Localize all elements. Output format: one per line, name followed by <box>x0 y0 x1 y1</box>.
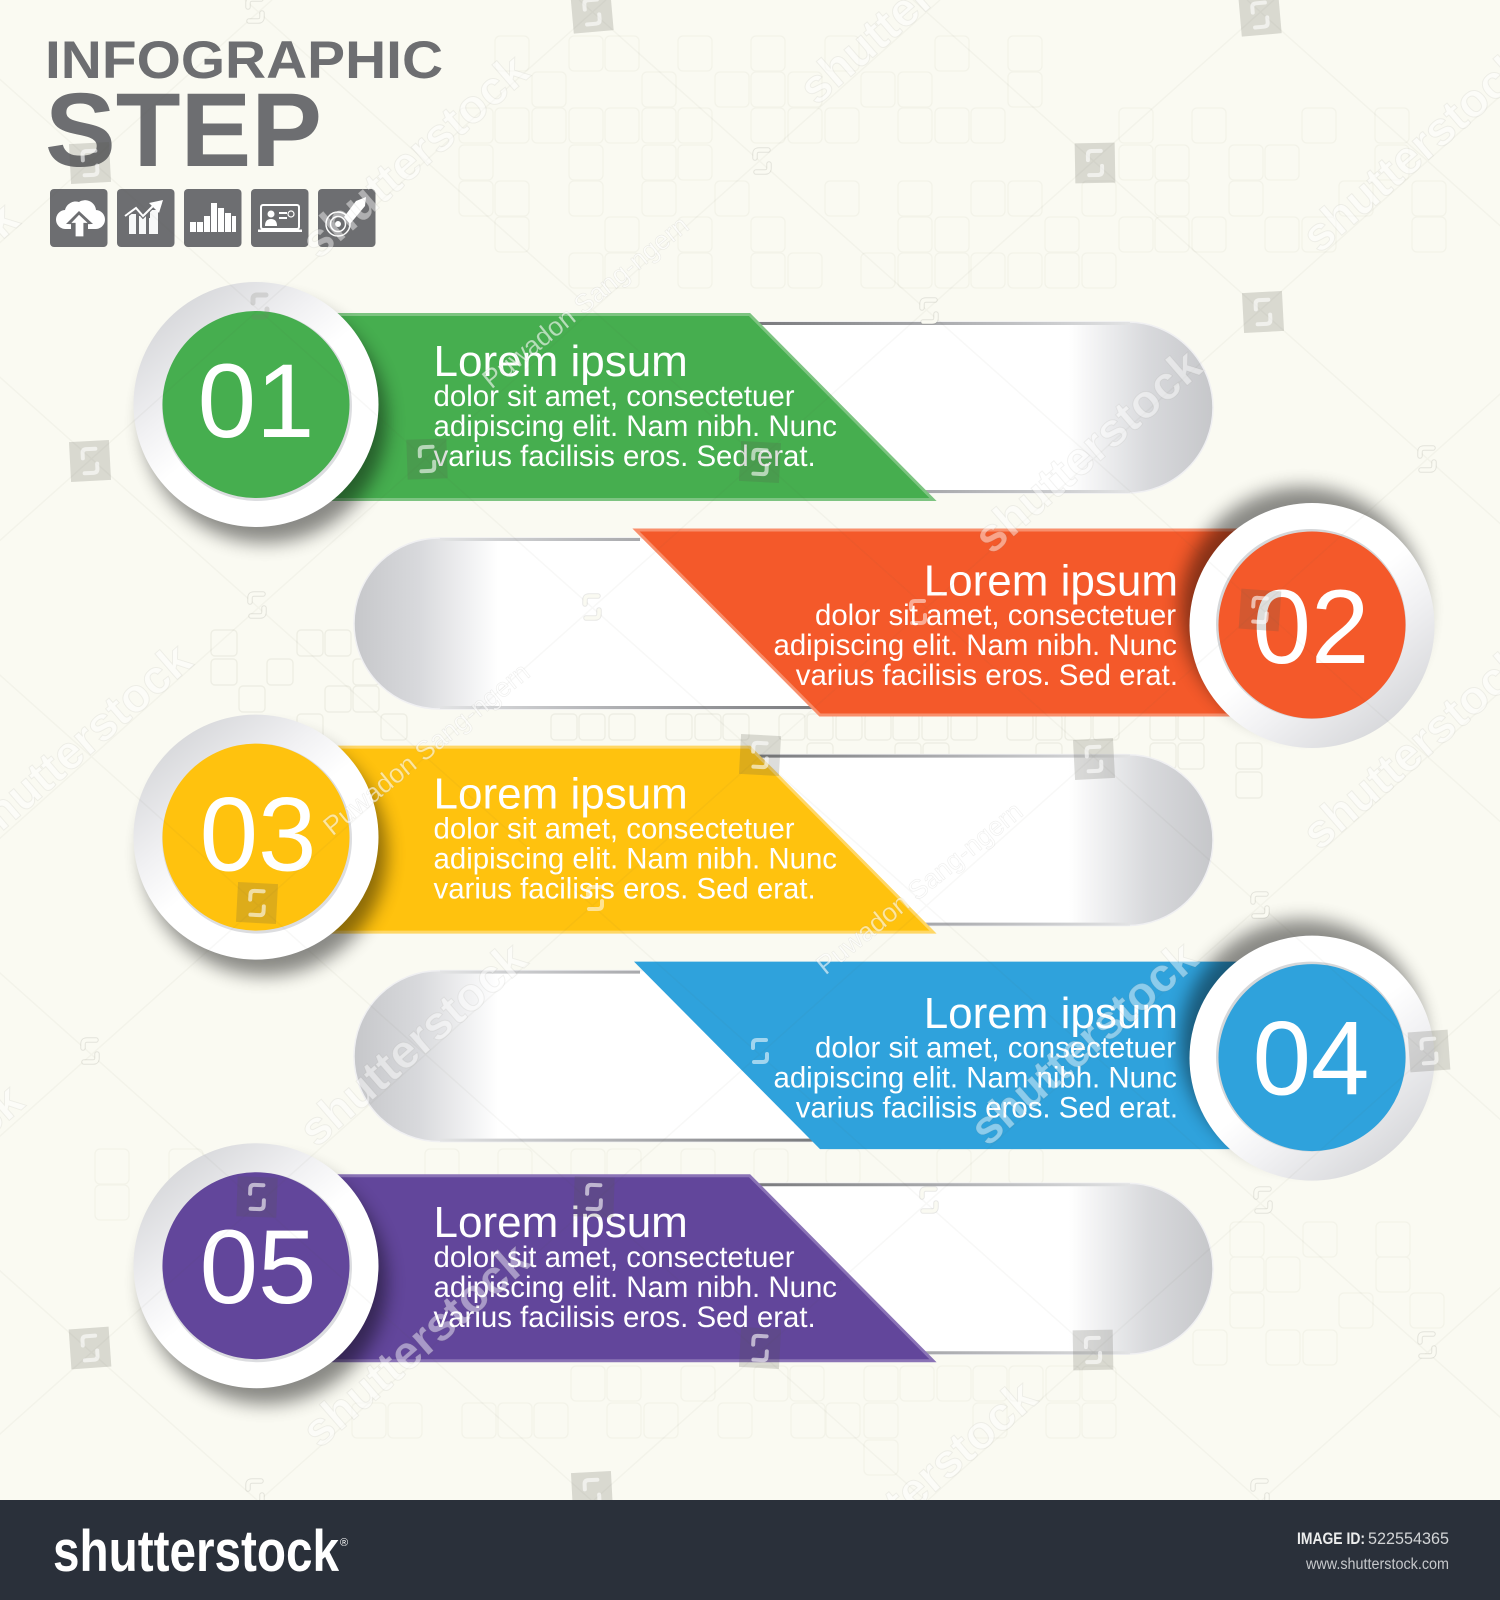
text block: varius facilisis eros. Sed erat. <box>796 659 1178 692</box>
band <box>330 747 933 932</box>
pill <box>740 322 1213 493</box>
step 04 <box>354 920 1434 1181</box>
text block: adipiscing elit. Nam nibh. Nunc <box>773 629 1177 662</box>
title <box>45 31 443 189</box>
circle shadow <box>143 299 387 543</box>
circle badge <box>162 744 352 934</box>
text block: dolor sit amet, consectetuer <box>815 1032 1176 1065</box>
circle badge: 04 <box>1253 1001 1369 1118</box>
text block: dolor sit amet, consectetuer <box>434 380 795 413</box>
pill <box>740 1183 1213 1354</box>
text block: adipiscing elit. Nam nibh. Nunc <box>434 410 837 443</box>
circle badge <box>1216 962 1406 1152</box>
text block: Lorem ipsum <box>924 989 1178 1038</box>
text block <box>773 556 1178 692</box>
step 01 <box>134 282 1213 543</box>
watermark text: shutterstock <box>288 930 537 1156</box>
icon: growth chart <box>117 189 174 247</box>
circle badge <box>1216 529 1406 719</box>
circle ring <box>134 282 378 527</box>
icon: target and rocket <box>318 189 376 247</box>
pill <box>354 538 830 709</box>
footer logo: ® <box>340 1537 348 1549</box>
watermark text: shutterstock <box>290 42 539 268</box>
step 05 <box>134 1143 1213 1404</box>
footer image id: 522554365 <box>1368 1530 1449 1548</box>
text block: Lorem ipsum <box>434 1198 688 1247</box>
text block: dolor sit amet, consectetuer <box>434 813 795 846</box>
circle shadow <box>1181 920 1425 1164</box>
icon: laptop video call <box>251 189 308 247</box>
text block: Lorem ipsum <box>434 770 688 819</box>
pill <box>740 755 1213 926</box>
watermark text: Puwadon Sang-ngern <box>810 796 1028 980</box>
text block <box>434 337 837 473</box>
text block: varius facilisis eros. Sed erat. <box>434 440 816 473</box>
circle badge <box>162 1172 352 1362</box>
circle badge <box>162 311 352 501</box>
circle badge: 05 <box>200 1209 316 1326</box>
text block <box>434 770 837 906</box>
watermark text: shutterstock <box>963 337 1212 563</box>
text block: Lorem ipsum <box>434 337 688 386</box>
circle shadow <box>1181 487 1425 731</box>
circle shadow <box>143 1160 387 1404</box>
circle badge: 03 <box>200 777 316 894</box>
text block: dolor sit amet, consectetuer <box>815 599 1176 632</box>
step 02 <box>354 487 1434 748</box>
watermark text: Puwadon Sang-ngern <box>476 210 694 394</box>
pill <box>354 971 830 1142</box>
circle badge: 02 <box>1253 569 1369 686</box>
circle badge: 01 <box>198 343 314 460</box>
text block: varius facilisis eros. Sed erat. <box>434 873 816 906</box>
text block: varius facilisis eros. Sed erat. <box>434 1301 816 1334</box>
footer logo: shutterstock <box>53 1519 340 1584</box>
circle ring <box>1190 503 1434 748</box>
band <box>636 530 1250 715</box>
footer url: www.shutterstock.com <box>1305 1556 1449 1573</box>
text block: adipiscing elit. Nam nibh. Nunc <box>434 843 837 876</box>
text block: adipiscing elit. Nam nibh. Nunc <box>773 1062 1177 1095</box>
circle ring <box>134 715 378 960</box>
circle ring <box>1190 936 1434 1181</box>
text block: varius facilisis eros. Sed erat. <box>796 1092 1178 1125</box>
band <box>330 1176 933 1361</box>
heading: STEP: STEP <box>45 72 322 189</box>
band <box>330 314 933 500</box>
footer image id: IMAGE ID: <box>1297 1530 1365 1548</box>
band <box>634 962 1250 1149</box>
heading: INFOGRAPHIC: INFOGRAPHIC <box>45 31 443 90</box>
icon: bar histogram <box>184 189 242 247</box>
footer image id <box>1297 1530 1449 1548</box>
text block: Lorem ipsum <box>924 556 1178 606</box>
watermark text: shutterstock <box>798 1368 1047 1594</box>
circle ring <box>134 1143 378 1388</box>
text block <box>773 989 1178 1125</box>
step 03 <box>134 715 1213 976</box>
watermark text: Puwadon Sang-ngern <box>317 657 535 841</box>
text block: adipiscing elit. Nam nibh. Nunc <box>434 1271 837 1304</box>
footer bar <box>0 1500 1500 1600</box>
watermark text: shutterstock <box>291 1231 540 1457</box>
watermark text: shutterstock <box>959 929 1208 1155</box>
text block <box>434 1198 837 1334</box>
text block: dolor sit amet, consectetuer <box>434 1241 795 1274</box>
icon row <box>50 189 376 247</box>
circle shadow <box>143 732 387 976</box>
icon: cloud upload <box>50 189 108 247</box>
